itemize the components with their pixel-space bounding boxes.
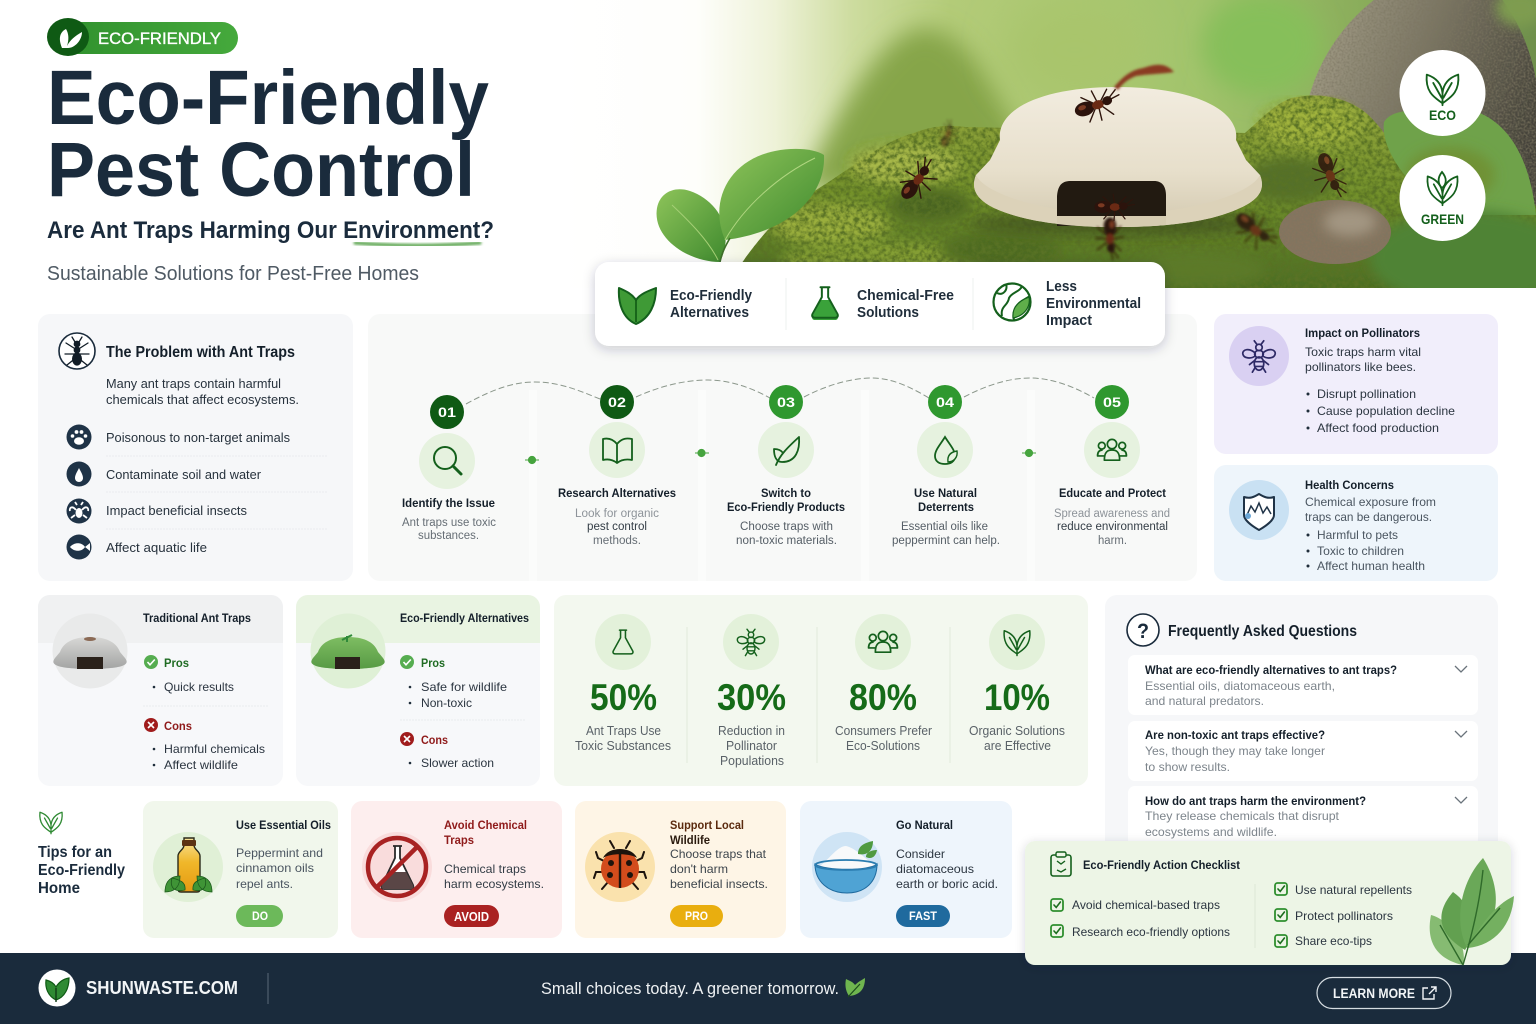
stat: 30%: Reduction in	[718, 724, 785, 738]
panel: health concerns: Health Concerns	[1305, 478, 1394, 492]
tip card: support local wildlife	[575, 801, 786, 938]
faq item 1: and natural predators.	[1145, 694, 1264, 708]
panel: impact on pollinators: Toxic traps harm vital	[1305, 345, 1421, 359]
stat: 80%: Consumers Prefer	[835, 724, 932, 738]
step 04: Deterrents	[918, 500, 974, 514]
item: contaminate: Contaminate soil and water	[106, 468, 261, 482]
panel: health concerns	[1214, 465, 1498, 581]
image: grey trap	[52, 614, 128, 688]
step 02: pest control	[587, 521, 647, 533]
step 02: Research Alternatives	[558, 486, 676, 500]
step 04: peppermint can help.	[892, 535, 1000, 547]
moss mounds	[726, 95, 1536, 290]
panel: traditional ant traps: Harmful chemicals	[164, 742, 265, 756]
faq item 2: Yes, though they may take longer	[1145, 744, 1325, 758]
stat: 80%: 80%	[849, 676, 917, 718]
stat: 10%	[969, 614, 1065, 753]
step 02	[558, 385, 676, 547]
faq item 2: to show results.	[1145, 760, 1230, 774]
stat: 80%: Eco-Solutions	[846, 739, 920, 753]
panel: impact on pollinators: Disrupt pollination	[1317, 387, 1416, 401]
step 05: reduce environmental	[1057, 521, 1168, 533]
panel: the problem with ant traps: chemicals that affect ecosystems.	[106, 393, 299, 407]
panel: the problem with ant traps: Many ant traps contain harmful	[106, 377, 281, 391]
badge: eco	[1400, 50, 1486, 136]
panel: eco-friendly alternatives: Slower action	[421, 756, 494, 770]
item: poisonous: Poisonous to non-target animals	[106, 431, 290, 445]
panel: health concerns: Chemical exposure from	[1305, 495, 1436, 509]
step 03: non-toxic materials.	[736, 535, 837, 547]
panel: eco-friendly alternatives: Safe for wildlife	[421, 680, 507, 694]
item: insects	[66, 498, 247, 524]
stat: 80%	[835, 614, 932, 753]
faq item 2	[1128, 721, 1478, 781]
panel: impact on pollinators: Affect food production	[1317, 421, 1439, 435]
step 01: substances.	[418, 530, 479, 542]
tip card: go natural	[800, 801, 1012, 938]
trap body	[974, 87, 1262, 227]
step 02: Look for organic	[575, 508, 659, 520]
feature card	[595, 262, 1165, 346]
tip card: go natural: earth or boric acid.	[896, 877, 998, 891]
subtitle with underline: Are Ant Traps Harming Our Environment?	[47, 217, 494, 244]
step 04: 04	[936, 394, 954, 410]
icon: bee	[1229, 326, 1289, 386]
title: Eco-Friendly	[47, 55, 489, 141]
badge: green: GREEN	[1421, 211, 1464, 227]
stat: 30%: Populations	[720, 754, 784, 768]
step 01: 01	[438, 404, 456, 420]
feature: eco-friendly alternatives: Alternatives	[670, 305, 749, 321]
stat: 50%: Toxic Substances	[575, 739, 671, 753]
tips heading: Eco-Friendly	[38, 862, 125, 879]
decorative leaves	[1430, 858, 1514, 965]
faq item 3: How do ant traps harm the environment?	[1145, 794, 1366, 808]
step 04: Essential oils like	[901, 521, 988, 533]
logo	[38, 970, 76, 1006]
tips heading: Tips for an	[38, 844, 112, 861]
tip card: essential oils: Peppermint and	[236, 846, 323, 860]
tip card: essential oils	[143, 801, 338, 938]
panel: frequently asked questions	[1105, 595, 1498, 855]
stat: 50%: Ant Traps Use	[586, 724, 661, 738]
feature: chemical-free: Solutions	[857, 305, 919, 321]
panel: action checklist: Eco-Friendly Action Checklist	[1083, 858, 1240, 872]
button: learn more: LEARN MORE	[1333, 986, 1415, 1001]
panel: traditional ant traps: Cons	[164, 719, 192, 733]
step 04: Use Natural	[914, 486, 977, 500]
icon: ladybug	[585, 832, 655, 902]
tip card: support local wildlife: don't harm	[670, 862, 728, 876]
panel: eco-friendly alternatives: Pros	[421, 656, 445, 670]
faq item 3: ecosystems and wildlife.	[1145, 825, 1277, 839]
feature: eco-friendly alternatives	[619, 288, 752, 324]
stat: 10%: 10%	[984, 676, 1050, 718]
faq item 3	[1128, 786, 1478, 846]
panel: traditional ant traps: Traditional Ant Traps	[143, 613, 251, 625]
tips heading	[38, 812, 125, 897]
step 03: Choose traps with	[740, 521, 833, 533]
feature: less environmental impact: Impact	[1046, 313, 1092, 329]
icon: ant	[59, 333, 95, 369]
step 01	[402, 395, 496, 542]
badge: do: DO	[252, 909, 268, 923]
faq item 2: Are non-toxic ant traps effective?	[1145, 728, 1325, 742]
faq item 1	[1128, 655, 1478, 715]
tip card: support local wildlife: Choose traps that	[670, 847, 767, 861]
panel: traditional ant traps: Pros	[164, 656, 189, 670]
checklist item: Protect pollinators	[1295, 909, 1393, 923]
stat: 30%	[717, 614, 786, 768]
checklist item: Share eco-tips	[1295, 934, 1372, 948]
tip card: go natural: Go Natural	[896, 818, 953, 832]
item: insects: Impact beneficial insects	[106, 504, 247, 518]
icon: clipboard	[1051, 852, 1071, 876]
tip card: support local wildlife: Wildlife	[670, 833, 710, 847]
badge: eco friendly pill	[47, 18, 238, 56]
tip card: avoid chemical traps: Traps	[444, 833, 474, 847]
panel: impact on pollinators: pollinators like bees.	[1305, 360, 1416, 374]
checklist item: Use natural repellents	[1295, 883, 1412, 897]
feature: chemical-free: Chemical-Free	[857, 288, 954, 304]
badge: green	[1400, 155, 1486, 241]
panel: eco-friendly alternatives: Eco-Friendly Alternatives	[400, 613, 529, 625]
tip card: avoid chemical traps: Avoid Chemical	[444, 818, 527, 832]
panel: traditional ant traps: Quick results	[164, 680, 234, 694]
badge: pro	[670, 905, 723, 927]
panel: impact on pollinators: Impact on Pollinators	[1305, 326, 1420, 340]
tip card: essential oils: cinnamon oils	[236, 861, 314, 875]
title	[47, 55, 489, 213]
panel: health concerns: traps can be dangerous.	[1305, 510, 1432, 524]
panel: eco-friendly alternatives: Non-toxic	[421, 696, 472, 710]
icon: question mark	[1127, 614, 1159, 646]
panel: statistics	[554, 595, 1088, 786]
step 05: Educate and Protect	[1059, 486, 1166, 500]
footer bar: SHUNWASTE.COM	[86, 978, 238, 998]
feature: less environmental impact: Environmental	[1046, 296, 1141, 312]
badge: avoid	[444, 905, 499, 927]
panel: impact on pollinators	[1214, 314, 1498, 454]
panel: health concerns: Harmful to pets	[1317, 528, 1398, 542]
stat: 50%: 50%	[590, 676, 657, 718]
icon: oil bottle	[153, 832, 223, 902]
connector dots	[525, 449, 1036, 464]
tip card: avoid chemical traps: harm ecosystems.	[444, 877, 544, 891]
image: green trap	[310, 614, 386, 688]
panel: traditional ant traps	[38, 595, 283, 786]
footer bar	[0, 953, 1536, 1024]
step 05: harm.	[1098, 535, 1127, 547]
checklist item: Research eco-friendly options	[1072, 925, 1230, 939]
item: contaminate	[66, 462, 261, 486]
panel: health concerns: Affect human health	[1317, 559, 1425, 573]
step 05: Spread awareness and	[1054, 508, 1170, 520]
badge: avoid: AVOID	[454, 910, 489, 924]
faq item 3: They release chemicals that disrupt	[1145, 809, 1340, 823]
badge: fast	[896, 905, 950, 927]
step 01: Identify the Issue	[402, 496, 495, 510]
icon: no chemicals	[362, 832, 432, 902]
badge: do	[236, 905, 283, 927]
panel: the problem with ant traps: The Problem with Ant Traps	[106, 344, 295, 361]
tip card: essential oils: repel ants.	[236, 877, 293, 891]
checklist item: Avoid chemical-based traps	[1072, 898, 1220, 912]
faq item 1: What are eco-friendly alternatives to ant traps?	[1145, 663, 1397, 677]
icon: bowl of powder	[812, 832, 882, 902]
title: Pest Control	[47, 127, 475, 213]
tip card: support local wildlife: Support Local	[670, 818, 744, 832]
item: aquatic	[66, 534, 207, 560]
feature: eco-friendly alternatives: Eco-Friendly	[670, 288, 752, 304]
badge: fast: FAST	[909, 909, 938, 923]
step 03: 03	[777, 394, 795, 410]
tips heading: Home	[38, 880, 80, 897]
stat: 10%: are Effective	[984, 739, 1051, 753]
panel: action checklist	[1025, 841, 1514, 965]
hero image: ant trap on moss	[656, 0, 1536, 288]
button: learn more	[1317, 978, 1451, 1008]
panel: the problem with ant traps	[38, 314, 353, 581]
step 05: 05	[1103, 394, 1121, 410]
panel: frequently asked questions: Frequently Asked Questions	[1168, 623, 1357, 640]
panel: health concerns: Toxic to children	[1317, 544, 1404, 558]
dashed connectors	[466, 378, 1094, 404]
panel: traditional ant traps: Affect wildlife	[164, 758, 238, 772]
left leaves	[657, 189, 726, 262]
badge: eco: ECO	[1429, 107, 1456, 123]
faq item 1: Essential oils, diatomaceous earth,	[1145, 679, 1335, 693]
tip card: go natural: Consider	[896, 847, 945, 861]
icon: question mark: ?	[1137, 620, 1149, 643]
step 01: Ant traps use toxic	[402, 517, 496, 529]
step 03: Eco-Friendly Products	[727, 500, 845, 514]
tip card: go natural: diatomaceous	[896, 862, 974, 876]
small stone	[1279, 200, 1391, 264]
feature: less environmental impact: Less	[1046, 279, 1077, 295]
tagline: Sustainable Solutions for Pest-Free Homes	[47, 262, 419, 285]
stat: 50%	[575, 614, 671, 753]
footer slogan: Small choices today. A greener tomorrow.	[541, 979, 839, 998]
panel: eco-friendly alternatives	[296, 595, 540, 786]
badge: pro: PRO	[685, 909, 708, 923]
stat: 30%: Pollinator	[726, 739, 777, 753]
item: poisonous	[66, 424, 290, 450]
feature: less environmental impact	[994, 279, 1141, 329]
tip card: avoid chemical traps: Chemical traps	[444, 862, 526, 876]
panel: eco-friendly alternatives: Cons	[421, 733, 448, 747]
stat: 30%: 30%	[717, 676, 786, 718]
right leaf	[1384, 110, 1536, 215]
stat: 10%: Organic Solutions	[969, 724, 1065, 738]
panel: five step process	[368, 314, 1197, 581]
panel: impact on pollinators: Cause population decline	[1317, 404, 1455, 418]
icon: shield	[1229, 480, 1289, 540]
step 05	[1054, 385, 1170, 547]
tip card: essential oils: Use Essential Oils	[236, 818, 331, 832]
step 04	[892, 385, 1000, 547]
tip card: avoid chemical traps	[351, 801, 562, 938]
item: aquatic: Affect aquatic life	[106, 541, 207, 555]
step 02: methods.	[593, 535, 641, 547]
step 03	[727, 385, 845, 547]
step 02: 02	[608, 394, 626, 410]
badge: eco friendly pill: ECO-FRIENDLY	[98, 29, 221, 48]
tip card: support local wildlife: beneficial insects.	[670, 877, 768, 891]
big stone	[1306, 0, 1536, 210]
feature: chemical-free	[812, 287, 954, 321]
icon: footer leaf	[845, 978, 865, 997]
step 03: Switch to	[761, 486, 811, 500]
